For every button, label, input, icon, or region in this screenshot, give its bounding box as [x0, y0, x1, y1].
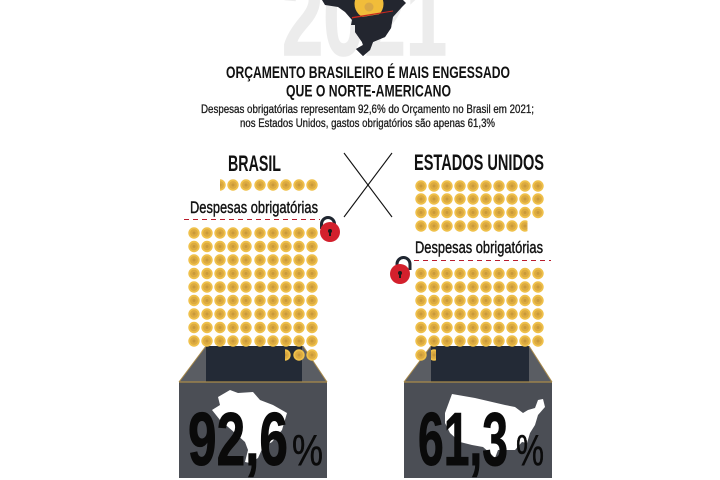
label: Despesas obrigatórias Brasil: Despesas obrigatórias [190, 199, 318, 217]
coins below the line: Estados Unidos [415, 268, 544, 361]
box: Brasil [179, 346, 327, 478]
icon: Brazil map white [212, 390, 287, 463]
subtitle: Despesas obrigatórias representam 92,6% do Orçamento no Brasil em 2021; [201, 102, 534, 116]
icon: USA map white [445, 394, 545, 458]
value: 92,6%: 92,6 [188, 397, 288, 480]
icon: padlock Brasil [320, 218, 340, 242]
dashed line: Brasil [184, 218, 320, 220]
value: 61,3%: 61,3 [418, 397, 508, 480]
subtitle: nos Estados Unidos, gastos obrigatórios são apenas 61,3% [240, 116, 495, 130]
box: Estados Unidos [404, 346, 552, 478]
coins above the line: Estados Unidos [415, 180, 544, 232]
icon: Brazil map with coin [322, 0, 406, 56]
value: 61,3%: % [516, 426, 544, 475]
heading: Estados Unidos: ESTADOS UNIDOS [414, 150, 544, 175]
coins above the line: Brasil [214, 179, 318, 191]
coins below the line: Brasil [188, 227, 318, 361]
subtitle [201, 102, 534, 130]
title: ORÇAMENTO BRASILEIRO É MAIS ENGESSADO [226, 63, 510, 82]
icon: versus X [344, 153, 392, 217]
heading: Brasil: BRASIL [228, 151, 281, 176]
label: Despesas obrigatórias Estados Unidos: Despesas obrigatórias [415, 239, 543, 257]
dashed line: Estados Unidos [414, 260, 551, 262]
icon: padlock Estados Unidos [390, 258, 410, 284]
title: QUE O NORTE-AMERICANO [286, 82, 451, 100]
value: 92,6%: % [292, 426, 323, 475]
title [226, 63, 510, 100]
